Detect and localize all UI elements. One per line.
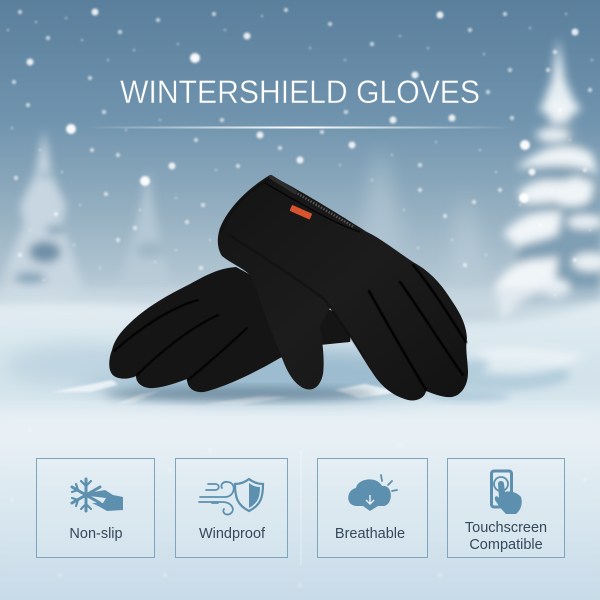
icon: phone with touching hand: [492, 471, 522, 514]
back glove: [105, 267, 375, 401]
feature: non-slip: [36, 458, 154, 558]
icon: cloud with sun rays: [348, 475, 397, 511]
icon: snowflake and hand: [72, 479, 123, 511]
label: non-slip: Non-slip: [69, 526, 123, 542]
front glove seams: [369, 265, 466, 390]
feature: breathable: [318, 458, 428, 558]
label: breathable: Breathable: [335, 526, 405, 542]
far faint trees: [355, 145, 408, 260]
right tree: [495, 38, 600, 320]
icon: wind and shield: [199, 479, 263, 515]
left tree: [0, 130, 84, 305]
label: touchscreen compatible: Touchscreen: [465, 520, 547, 536]
snow ground: [0, 300, 600, 600]
divider: [300, 450, 302, 565]
title: WINTERSHIELD GLOVES: [120, 74, 480, 110]
label: windproof: Windproof: [199, 526, 266, 542]
label: touchscreen compatible: Compatible: [469, 537, 543, 553]
title rule: [85, 126, 515, 128]
front glove: [218, 175, 468, 400]
frozen ice patch: [0, 345, 600, 442]
feature: touchscreen compatible: [448, 458, 564, 558]
center-left tree: [118, 170, 172, 300]
zipper: [295, 192, 354, 227]
feature: windproof: [176, 458, 288, 558]
snowy trees: [0, 38, 600, 320]
brand tag: [290, 205, 312, 220]
back glove seams: [114, 300, 247, 380]
gloves: [105, 175, 468, 401]
